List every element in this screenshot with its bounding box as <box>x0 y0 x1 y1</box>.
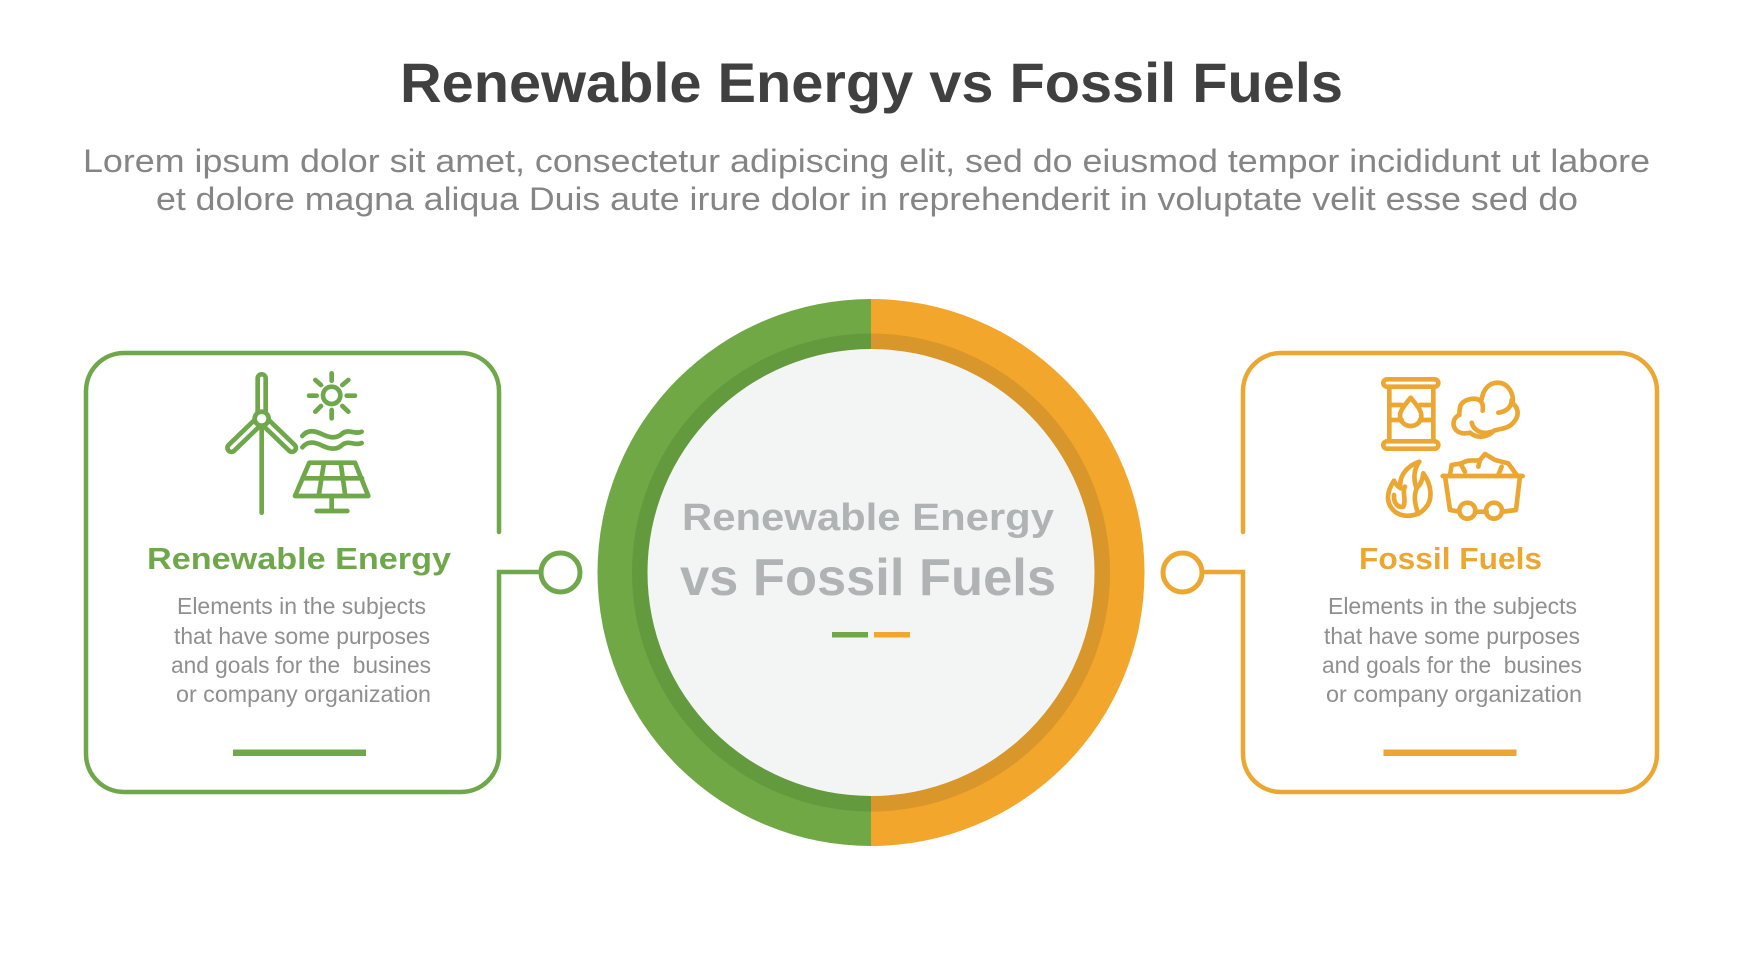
centre heading line 1: Renewable Energy <box>682 497 1054 539</box>
subtitle text block: et dolore magna aliqua Duis aute irure dolor in reprehenderit in voluptate velit esse sed do <box>156 181 1578 217</box>
subtitle text block: Lorem ipsum dolor sit amet, consectetur adipiscing elit, sed do eiusmod tempor incididunt ut labore <box>83 143 1650 179</box>
card body text: Elements in the subjects <box>177 593 426 619</box>
accent bar <box>233 750 366 756</box>
card body text: or company organization <box>176 681 431 707</box>
card body text: or company organization <box>1326 681 1582 707</box>
card body text: Elements in the subjects <box>1328 593 1577 619</box>
icon: oil barrel, smoke, flame and coal cart <box>1383 379 1523 519</box>
icon: wind turbine, sun, waves and solar panel <box>226 373 368 513</box>
card body text: and goals for the busines <box>171 652 431 678</box>
centre disc <box>648 349 1094 796</box>
connector node <box>1163 553 1202 592</box>
card heading: Renewable Energy <box>147 541 452 576</box>
connector node <box>541 553 580 592</box>
card body text: that have some purposes <box>174 623 430 649</box>
panel: fossil fuels card <box>1163 353 1657 792</box>
centre heading line 2: vs Fossil Fuels <box>680 549 1056 607</box>
green dash <box>832 632 868 638</box>
card body text: and goals for the busines <box>1322 652 1582 678</box>
card body text: that have some purposes <box>1324 623 1580 649</box>
right half ring: orange <box>871 299 1145 846</box>
card outline with connector gap <box>1203 353 1657 792</box>
panel: central comparison circle <box>598 299 1145 846</box>
accent bar <box>1384 750 1516 756</box>
card heading: Fossil Fuels <box>1359 541 1542 576</box>
card body text <box>1322 593 1582 707</box>
subtitle text block <box>83 143 1650 217</box>
title: Renewable Energy vs Fossil Fuels <box>400 51 1343 114</box>
inner ring shade: orange <box>871 334 1110 812</box>
inner ring shade: green <box>632 334 871 812</box>
left half ring: green <box>598 299 871 846</box>
panel: renewable energy card <box>86 353 580 792</box>
card body text <box>171 593 431 707</box>
orange dash <box>874 632 910 638</box>
card outline with connector gap <box>86 353 540 792</box>
